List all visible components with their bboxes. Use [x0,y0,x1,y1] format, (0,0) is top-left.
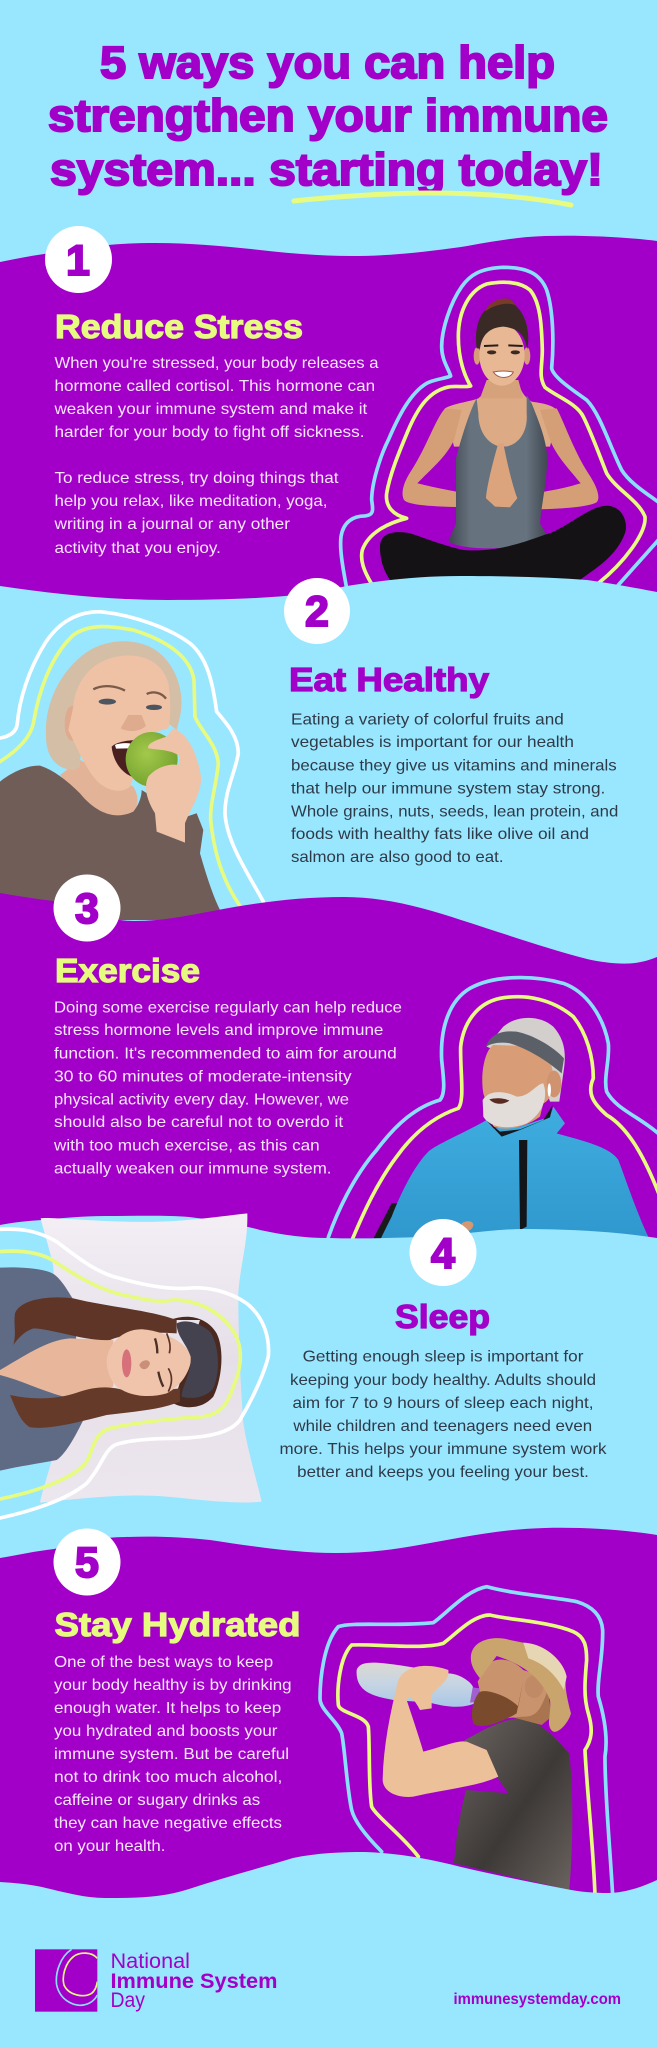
number badge 1 [45,226,112,293]
body text: sleep: keeping your body healthy. Adults should [290,1372,596,1389]
body text: eat healthy: because they give us vitamins and minerals [291,757,617,774]
body text: stay hydrated: One of the best ways to keep [54,1654,273,1671]
logo wordmark: National [110,1950,190,1973]
body text: eat healthy: foods with healthy fats like olive oil and [291,826,589,843]
website url: immunesystemday.com [454,1991,621,2008]
purple wave band 3 [0,893,657,1300]
body text: sleep [280,1349,608,1481]
heading: eat healthy: Eat Healthy [289,661,490,698]
body text: reduce stress: To reduce stress, try doing things that [54,470,339,487]
body text: eat healthy: Eating a variety of colorful fruits and [291,711,564,728]
body text: eat healthy: Whole grains, nuts, seeds, lean protein, and [291,803,618,820]
body text: reduce stress: writing in a journal or any other [53,516,291,533]
number badge 5: 5 [75,1539,99,1587]
body text: eat healthy: that help our immune system stay strong. [291,780,605,798]
body text: sleep: more. This helps your immune system work [280,1441,608,1458]
body text: sleep: Getting enough sleep is important for [303,1349,584,1366]
heading: reduce stress: Reduce Stress [55,308,303,345]
body text: stay hydrated: enough water. It helps to keep [54,1700,281,1717]
body text: exercise: function. It's recommended to aim for around [54,1045,397,1062]
title underline [294,193,571,205]
body text: exercise [53,999,402,1178]
title [48,37,608,195]
number badge 2 [284,578,350,644]
photo: woman meditating [380,298,626,580]
light blue wave band 4 [0,1216,657,1600]
logo mark [35,1949,97,2012]
body text: stay hydrated: immune system. But be careful [54,1746,289,1763]
body text: reduce stress: harder for your body to fight off sickness. [54,424,364,441]
title: 5 ways you can help [100,37,555,88]
body text: exercise: 30 to 60 minutes of moderate-intensity [54,1069,352,1086]
body text: eat healthy: salmon are also good to eat. [291,849,504,866]
body text: reduce stress: activity that you enjoy. [54,540,221,557]
body text: exercise: stress hormone levels and improve immune [54,1022,383,1039]
body text: stay hydrated: on your health. [54,1838,166,1855]
body text: stay hydrated: not to drink too much alcohol, [54,1769,282,1786]
number badge 3: 3 [75,885,99,933]
contour lines around yoga woman [341,267,657,588]
body text: reduce stress [53,355,379,557]
body text: sleep: aim for 7 to 9 hours of sleep each night, [292,1395,594,1412]
body text: stay hydrated: they can have negative effects [54,1815,282,1832]
title: system... starting today! [50,144,603,195]
purple wave band 5 [0,1528,657,1920]
body text: stay hydrated [54,1654,292,1855]
body text: exercise: with too much exercise, as this can [53,1138,320,1154]
body text: eat healthy: vegetables is important for our health [291,734,574,751]
body text: sleep: while children and teenagers need even [292,1418,592,1435]
body text: exercise: Doing some exercise regularly can help reduce [54,999,402,1016]
number badge 3 [54,874,120,942]
logo wordmark [110,1950,278,2012]
contour lines around sleeping woman [0,1229,269,1518]
photo: man drinking water from a bottle [357,1638,572,1890]
panel: exercise [0,874,657,1300]
title: strengthen your immune [48,90,608,141]
panel: footer [0,1852,657,2012]
body text: stay hydrated: your body healthy is by drinking [54,1677,292,1694]
purple wave band 1 [0,236,657,620]
body text: exercise: physical activity every day. However, we [54,1092,349,1108]
body text: reduce stress: When you're stressed, your body releases a [54,355,379,372]
logo wordmark: Day [110,1989,145,2012]
body text: exercise: actually weaken our immune system. [54,1161,332,1178]
number badge 2: 2 [305,588,329,636]
photo: woman sleeping on a pillow [0,1213,262,1503]
body text: stay hydrated: you hydrated and boosts your [54,1723,278,1740]
body text: eat healthy [291,711,618,866]
body text: stay hydrated: caffeine or sugary drinks as [54,1792,260,1809]
light blue wave band 2 [0,576,657,960]
number badge 5 [54,1528,120,1596]
body text: reduce stress: weaken your immune system and make it [53,401,368,418]
panel: eat healthy [0,576,657,960]
panel: reduce stress [0,226,657,620]
body text: reduce stress: hormone called cortisol. This hormone can [54,378,375,395]
contour lines around apple woman [0,612,263,906]
photo: woman eating an apple [0,641,220,920]
contour lines around exercising man [328,978,657,1239]
number badge 4: 4 [431,1230,455,1278]
panel: stay hydrated [0,1528,657,1920]
panel: sleep [0,1213,657,1600]
photo: older man in blue jacket [373,1018,651,1242]
body text: exercise: should also be careful not to overdo it [54,1114,344,1131]
light blue wave band 6 [0,1852,657,2048]
heading: sleep: Sleep [395,1298,490,1335]
body text: sleep: better and keeps you feeling your best. [297,1464,589,1481]
body text: reduce stress: help you relax, like meditation, yoga, [54,493,328,510]
heading: stay hydrated: Stay Hydrated [54,1606,300,1643]
number badge 1: 1 [66,237,90,285]
contour lines around drinking man [320,1587,613,1895]
heading: exercise: Exercise [55,952,200,989]
number badge 4 [410,1219,476,1286]
logo wordmark: Immune System [110,1970,278,1993]
